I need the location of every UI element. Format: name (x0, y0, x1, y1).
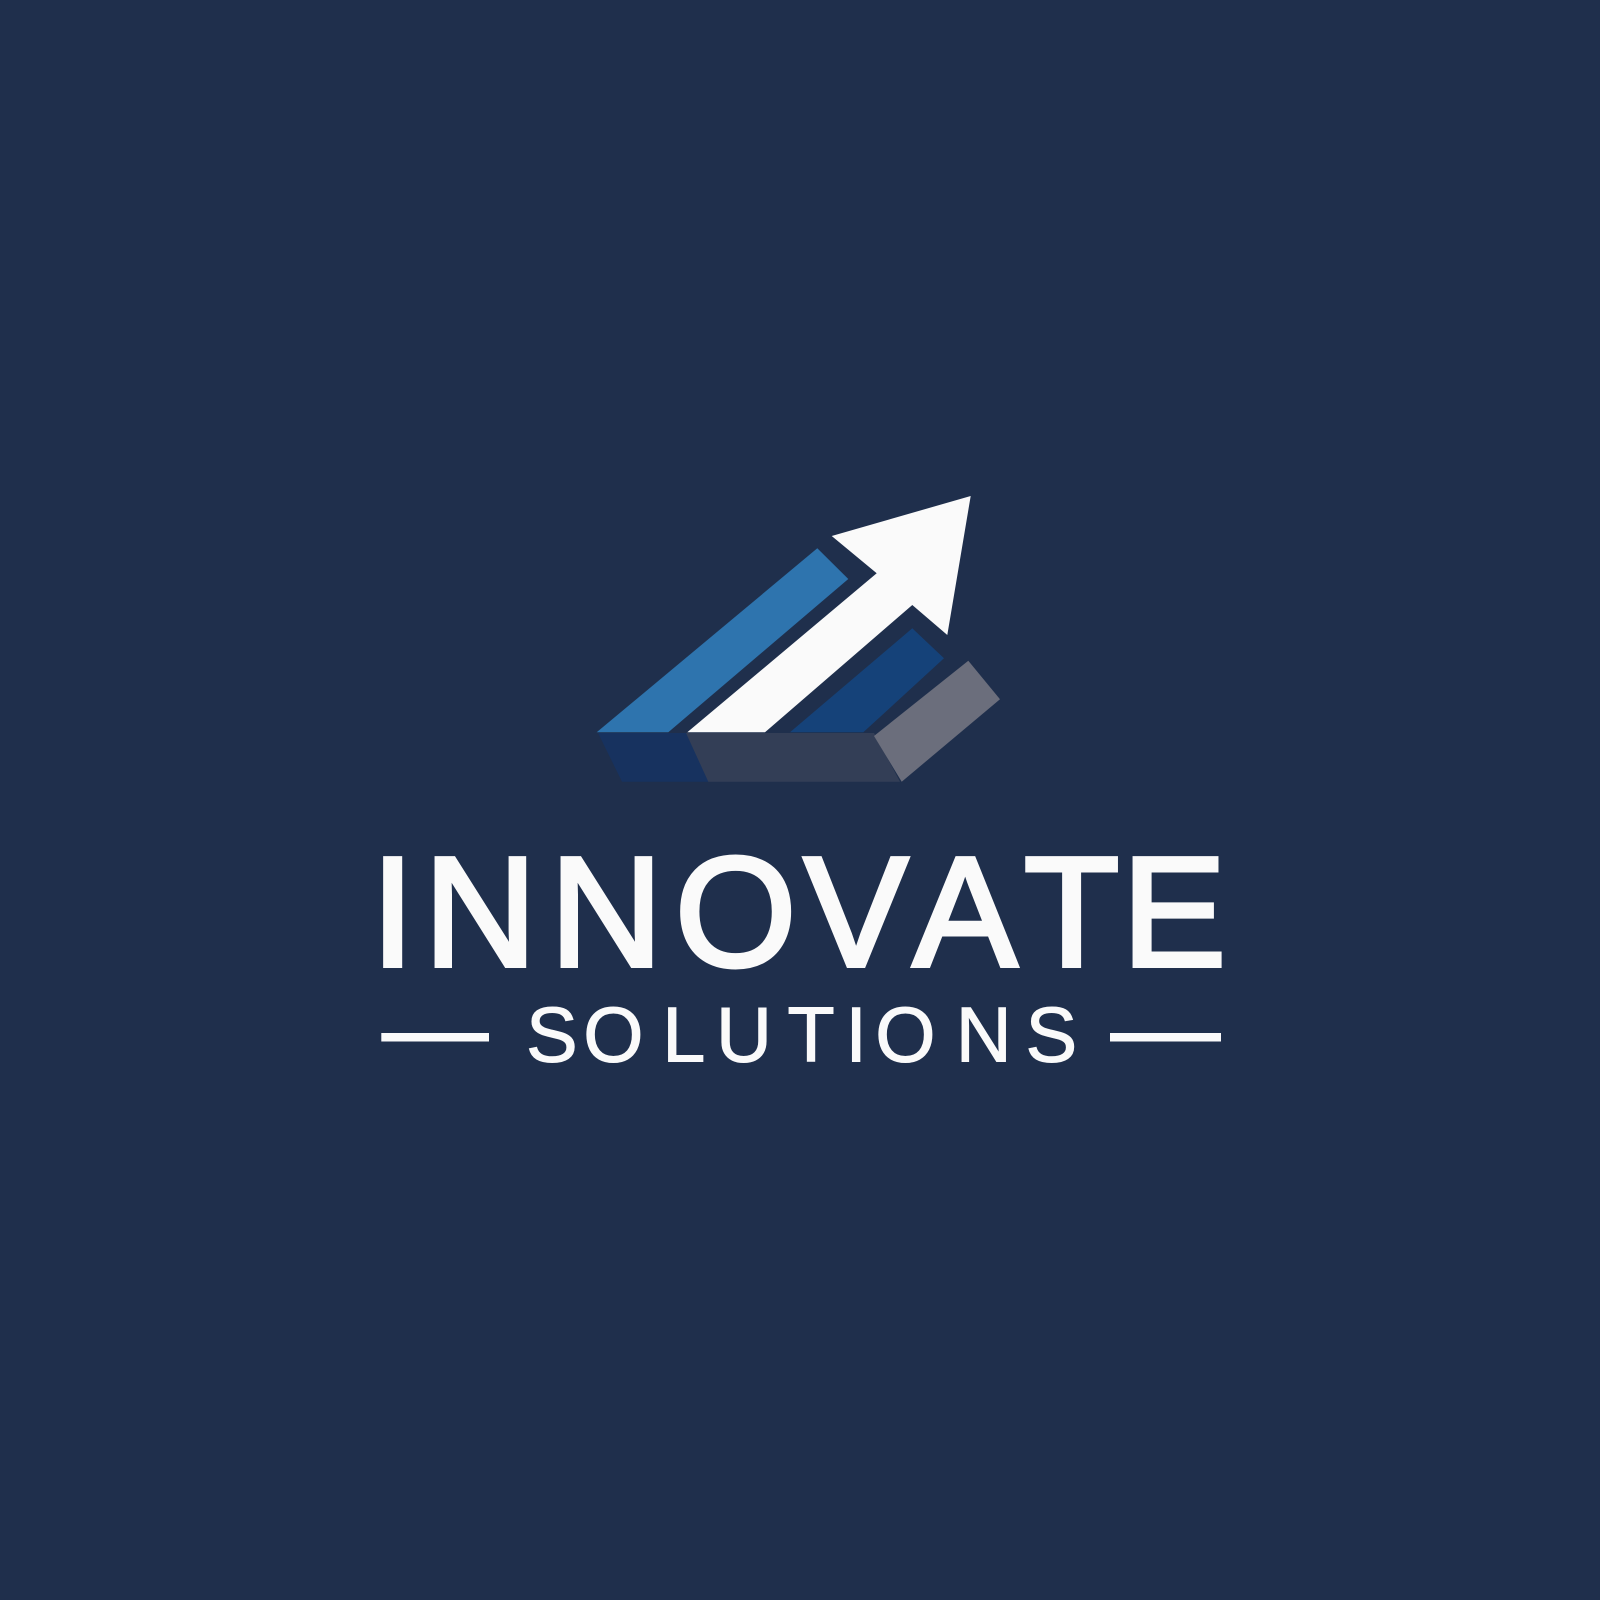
left rule (381, 1033, 489, 1042)
right rule (1110, 1033, 1221, 1042)
icon: navy base (598, 733, 709, 782)
icon: grey end block (874, 661, 1000, 782)
icon: slate base (686, 733, 900, 782)
icon: white arrow (687, 496, 971, 732)
icon: dark blue bar (790, 628, 944, 732)
subtitle: SOLUTIONS: SOLUTIONS (526, 993, 1077, 1079)
title: INNOVATE: INNOVATE (371, 826, 1226, 1000)
icon: rising arrow on stepped bars (597, 496, 1000, 782)
icon: light blue bar (597, 548, 848, 732)
